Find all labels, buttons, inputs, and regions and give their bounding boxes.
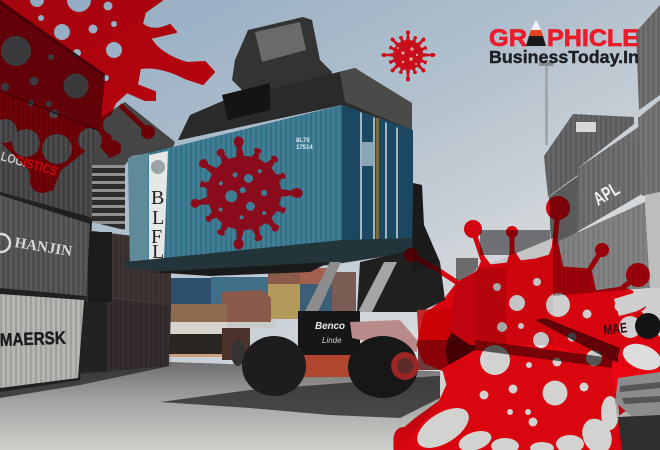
right door bars <box>360 112 398 240</box>
left wheel <box>242 336 306 396</box>
ground shadows <box>0 366 450 418</box>
left container stack <box>0 0 175 392</box>
logo wordmark: GR <box>489 25 527 52</box>
right container stacks <box>400 5 660 450</box>
arm of worker <box>535 318 620 362</box>
concrete under splat <box>400 350 620 450</box>
blue container <box>124 105 413 276</box>
mid column <box>92 102 175 230</box>
BLFL stripe <box>149 151 168 260</box>
lifter head <box>178 17 412 140</box>
logo: PHICLE <box>547 25 639 52</box>
lamp post <box>539 62 553 145</box>
icon: small virus <box>381 30 436 82</box>
blue container: 17514 <box>296 145 313 151</box>
chassis label: Benco <box>315 321 345 332</box>
MAERSK on splat: MAE <box>602 319 628 338</box>
cab <box>357 250 445 312</box>
BLFL logo <box>151 160 165 174</box>
background truck <box>167 290 275 366</box>
chassis <box>298 311 360 359</box>
container: HANJIN <box>0 195 90 296</box>
logo <box>489 20 639 67</box>
BLFL label: L <box>152 241 164 263</box>
reach stacker machine: Linde <box>322 336 342 345</box>
front wheel <box>348 336 418 398</box>
worker shirt <box>618 342 660 372</box>
reach stacker machine <box>242 183 476 398</box>
label: APL: APL <box>590 179 623 210</box>
BLFL label: B <box>151 187 164 209</box>
stack backing <box>0 0 105 392</box>
container: dark top <box>0 5 105 130</box>
virus splat: upper left <box>0 0 215 193</box>
container: MAERSK <box>0 294 84 388</box>
BLFL label: L <box>152 207 164 229</box>
label: HANJIN: HANJIN <box>13 235 73 260</box>
distant containers <box>170 230 550 319</box>
ground <box>0 362 660 450</box>
axle <box>290 355 352 377</box>
underframe <box>124 238 413 275</box>
code: 8L70 <box>296 138 310 144</box>
label: logistics: LOGISTICS <box>0 148 59 179</box>
label: MAERSK: MAERSK <box>0 328 66 350</box>
BLFL label: F <box>151 226 162 248</box>
worker <box>615 313 660 450</box>
mid-distance containers <box>448 268 553 345</box>
far wheel <box>446 327 476 375</box>
booms <box>298 262 341 325</box>
logo cone <box>526 20 546 46</box>
virus splat: lower right <box>380 190 660 450</box>
logo subtitle: BusinessToday.In <box>489 47 639 67</box>
hood <box>417 308 466 370</box>
icon: virus on container <box>184 130 309 255</box>
